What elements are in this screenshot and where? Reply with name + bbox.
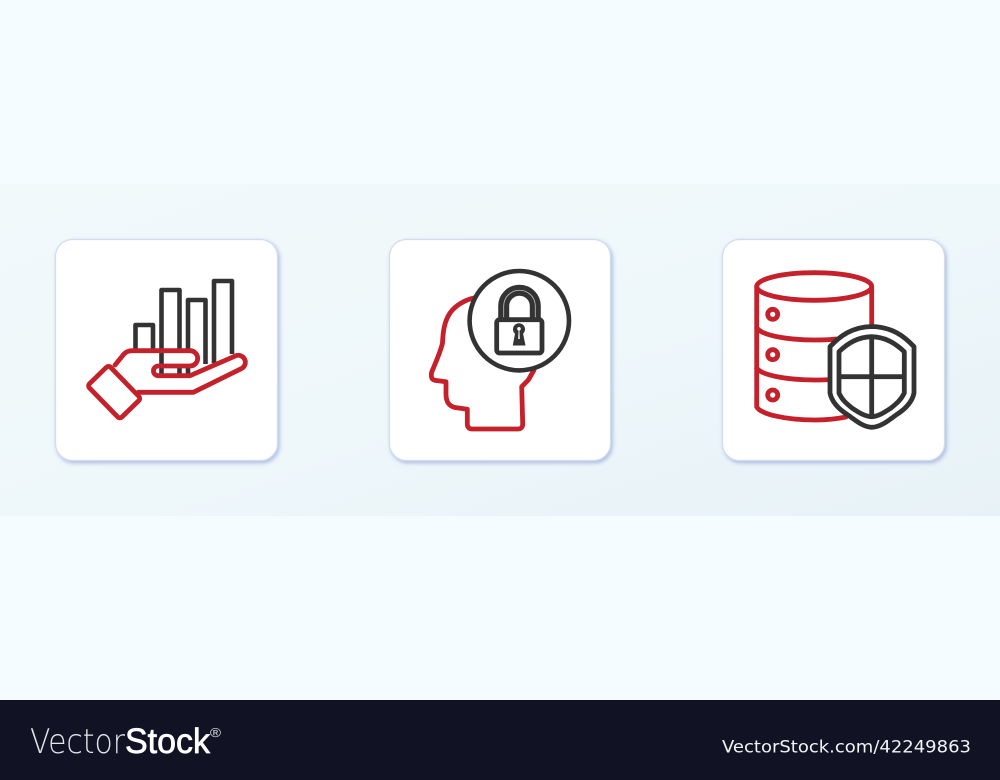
middle band bbox=[0, 184, 1000, 516]
panel: head with padlock bbox=[390, 240, 610, 460]
panel: hand with bar chart bbox=[56, 240, 278, 460]
icon: padlock in circle bbox=[470, 271, 569, 370]
icon: bar chart bbox=[136, 281, 232, 374]
logo: VectorStock bbox=[30, 722, 221, 762]
logo: VectorStock: Vector bbox=[30, 722, 125, 762]
icon: shield bbox=[830, 326, 914, 427]
icon: open hand bbox=[87, 351, 245, 419]
icon: head profile bbox=[431, 298, 534, 429]
image id text: VectorStock.com/42249863 bbox=[722, 738, 971, 756]
logo: VectorStock: Stock bbox=[125, 722, 210, 761]
card bbox=[56, 240, 278, 460]
logo: VectorStock: ® bbox=[210, 725, 221, 740]
panel: database with shield bbox=[722, 240, 944, 460]
footer bar bbox=[0, 700, 1000, 780]
icon: database cylinder bbox=[757, 273, 872, 420]
card bbox=[390, 240, 610, 460]
card bbox=[722, 240, 944, 460]
